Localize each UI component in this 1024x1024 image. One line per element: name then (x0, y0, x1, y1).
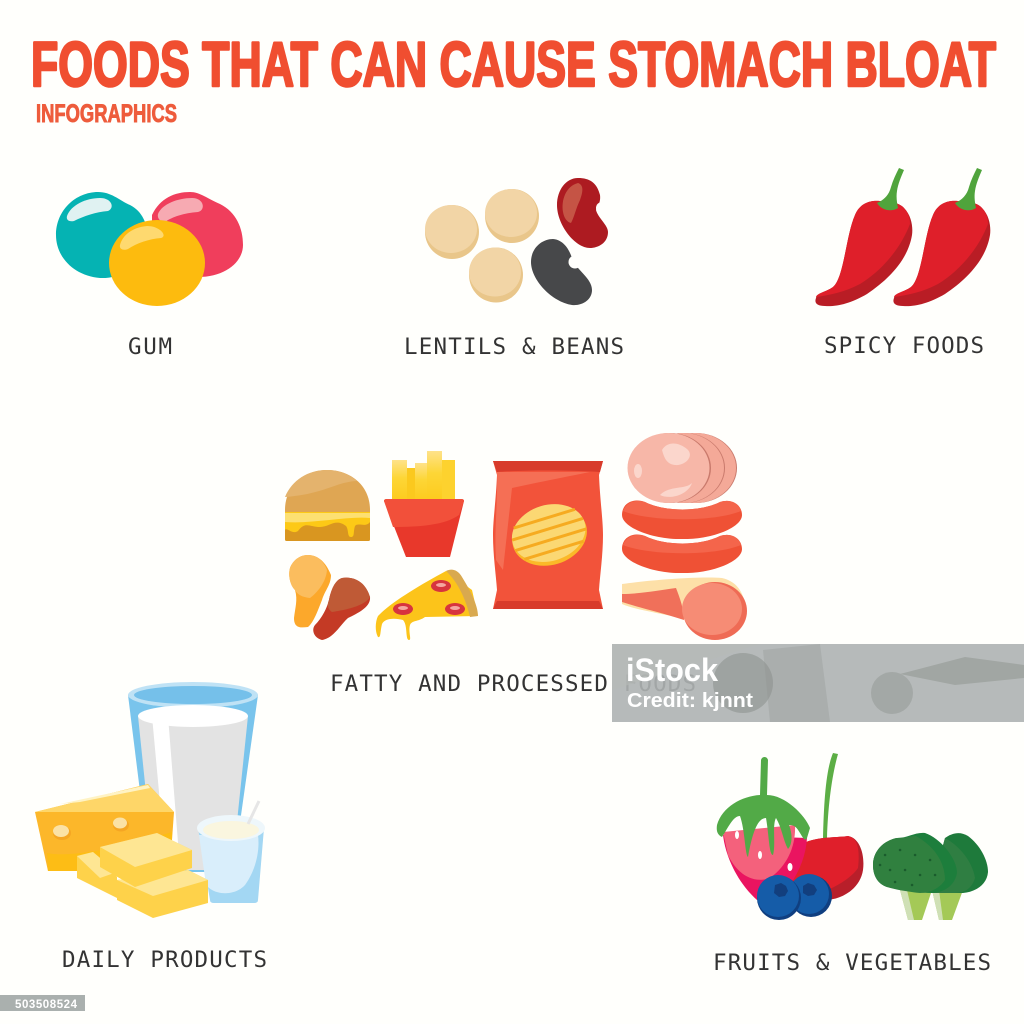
burger (285, 470, 370, 541)
lentil one (425, 205, 479, 259)
chili one (815, 168, 912, 306)
label: spicy foods: SPICY FOODS (824, 333, 984, 359)
label: daily products: DAILY PRODUCTS (62, 947, 267, 973)
pork cut (622, 577, 747, 640)
subtitle: INFOGRAPHICS (36, 100, 177, 128)
french fries (384, 451, 464, 557)
pizza slice (376, 570, 478, 640)
chip bag (493, 461, 603, 609)
sausage top (622, 501, 742, 539)
watermark logo: iStock (626, 652, 718, 688)
icon group: fatty and processed foods (285, 433, 747, 640)
image id tag: 503508524 (15, 999, 78, 1011)
teal gum ball (56, 192, 148, 278)
red gum ball (152, 192, 243, 277)
kidney bean black (531, 239, 592, 305)
cheese wedge (35, 784, 174, 871)
blueberries (757, 874, 832, 920)
fried chicken dark (313, 578, 370, 640)
label: fatty and processed foods: FATTY AND PROCESSED FOODS (330, 671, 696, 697)
label: fruits and vegetables: FRUITS & VEGETABLES (713, 950, 991, 976)
icon: lentils and beans (425, 178, 608, 305)
chili two (893, 168, 990, 306)
icon: gum balls (56, 192, 243, 306)
sliced ham (628, 433, 737, 503)
strawberry (717, 757, 810, 900)
label: lentils and beans: LENTILS & BEANS (404, 334, 624, 360)
lentil three (469, 248, 523, 302)
milk glass (128, 682, 258, 872)
kidney bean red (557, 178, 608, 248)
broccoli left (873, 833, 957, 920)
butter blocks (77, 833, 208, 918)
label: gum: GUM (128, 334, 172, 360)
fried chicken light (289, 555, 331, 627)
lentil two (485, 189, 539, 243)
cherry (790, 753, 863, 900)
watermark credit: Credit: kjnnt (627, 690, 753, 712)
watermark panel (612, 644, 1024, 722)
potato chip (504, 495, 594, 575)
yogurt cup (197, 801, 265, 903)
icon group: fruits (717, 753, 988, 920)
broccoli right (930, 833, 988, 920)
sausage bottom (622, 535, 742, 573)
image id tag (0, 995, 85, 1011)
yellow gum ball (109, 220, 205, 306)
icon: chili peppers (815, 168, 990, 306)
icon group: dairy products (35, 682, 265, 918)
